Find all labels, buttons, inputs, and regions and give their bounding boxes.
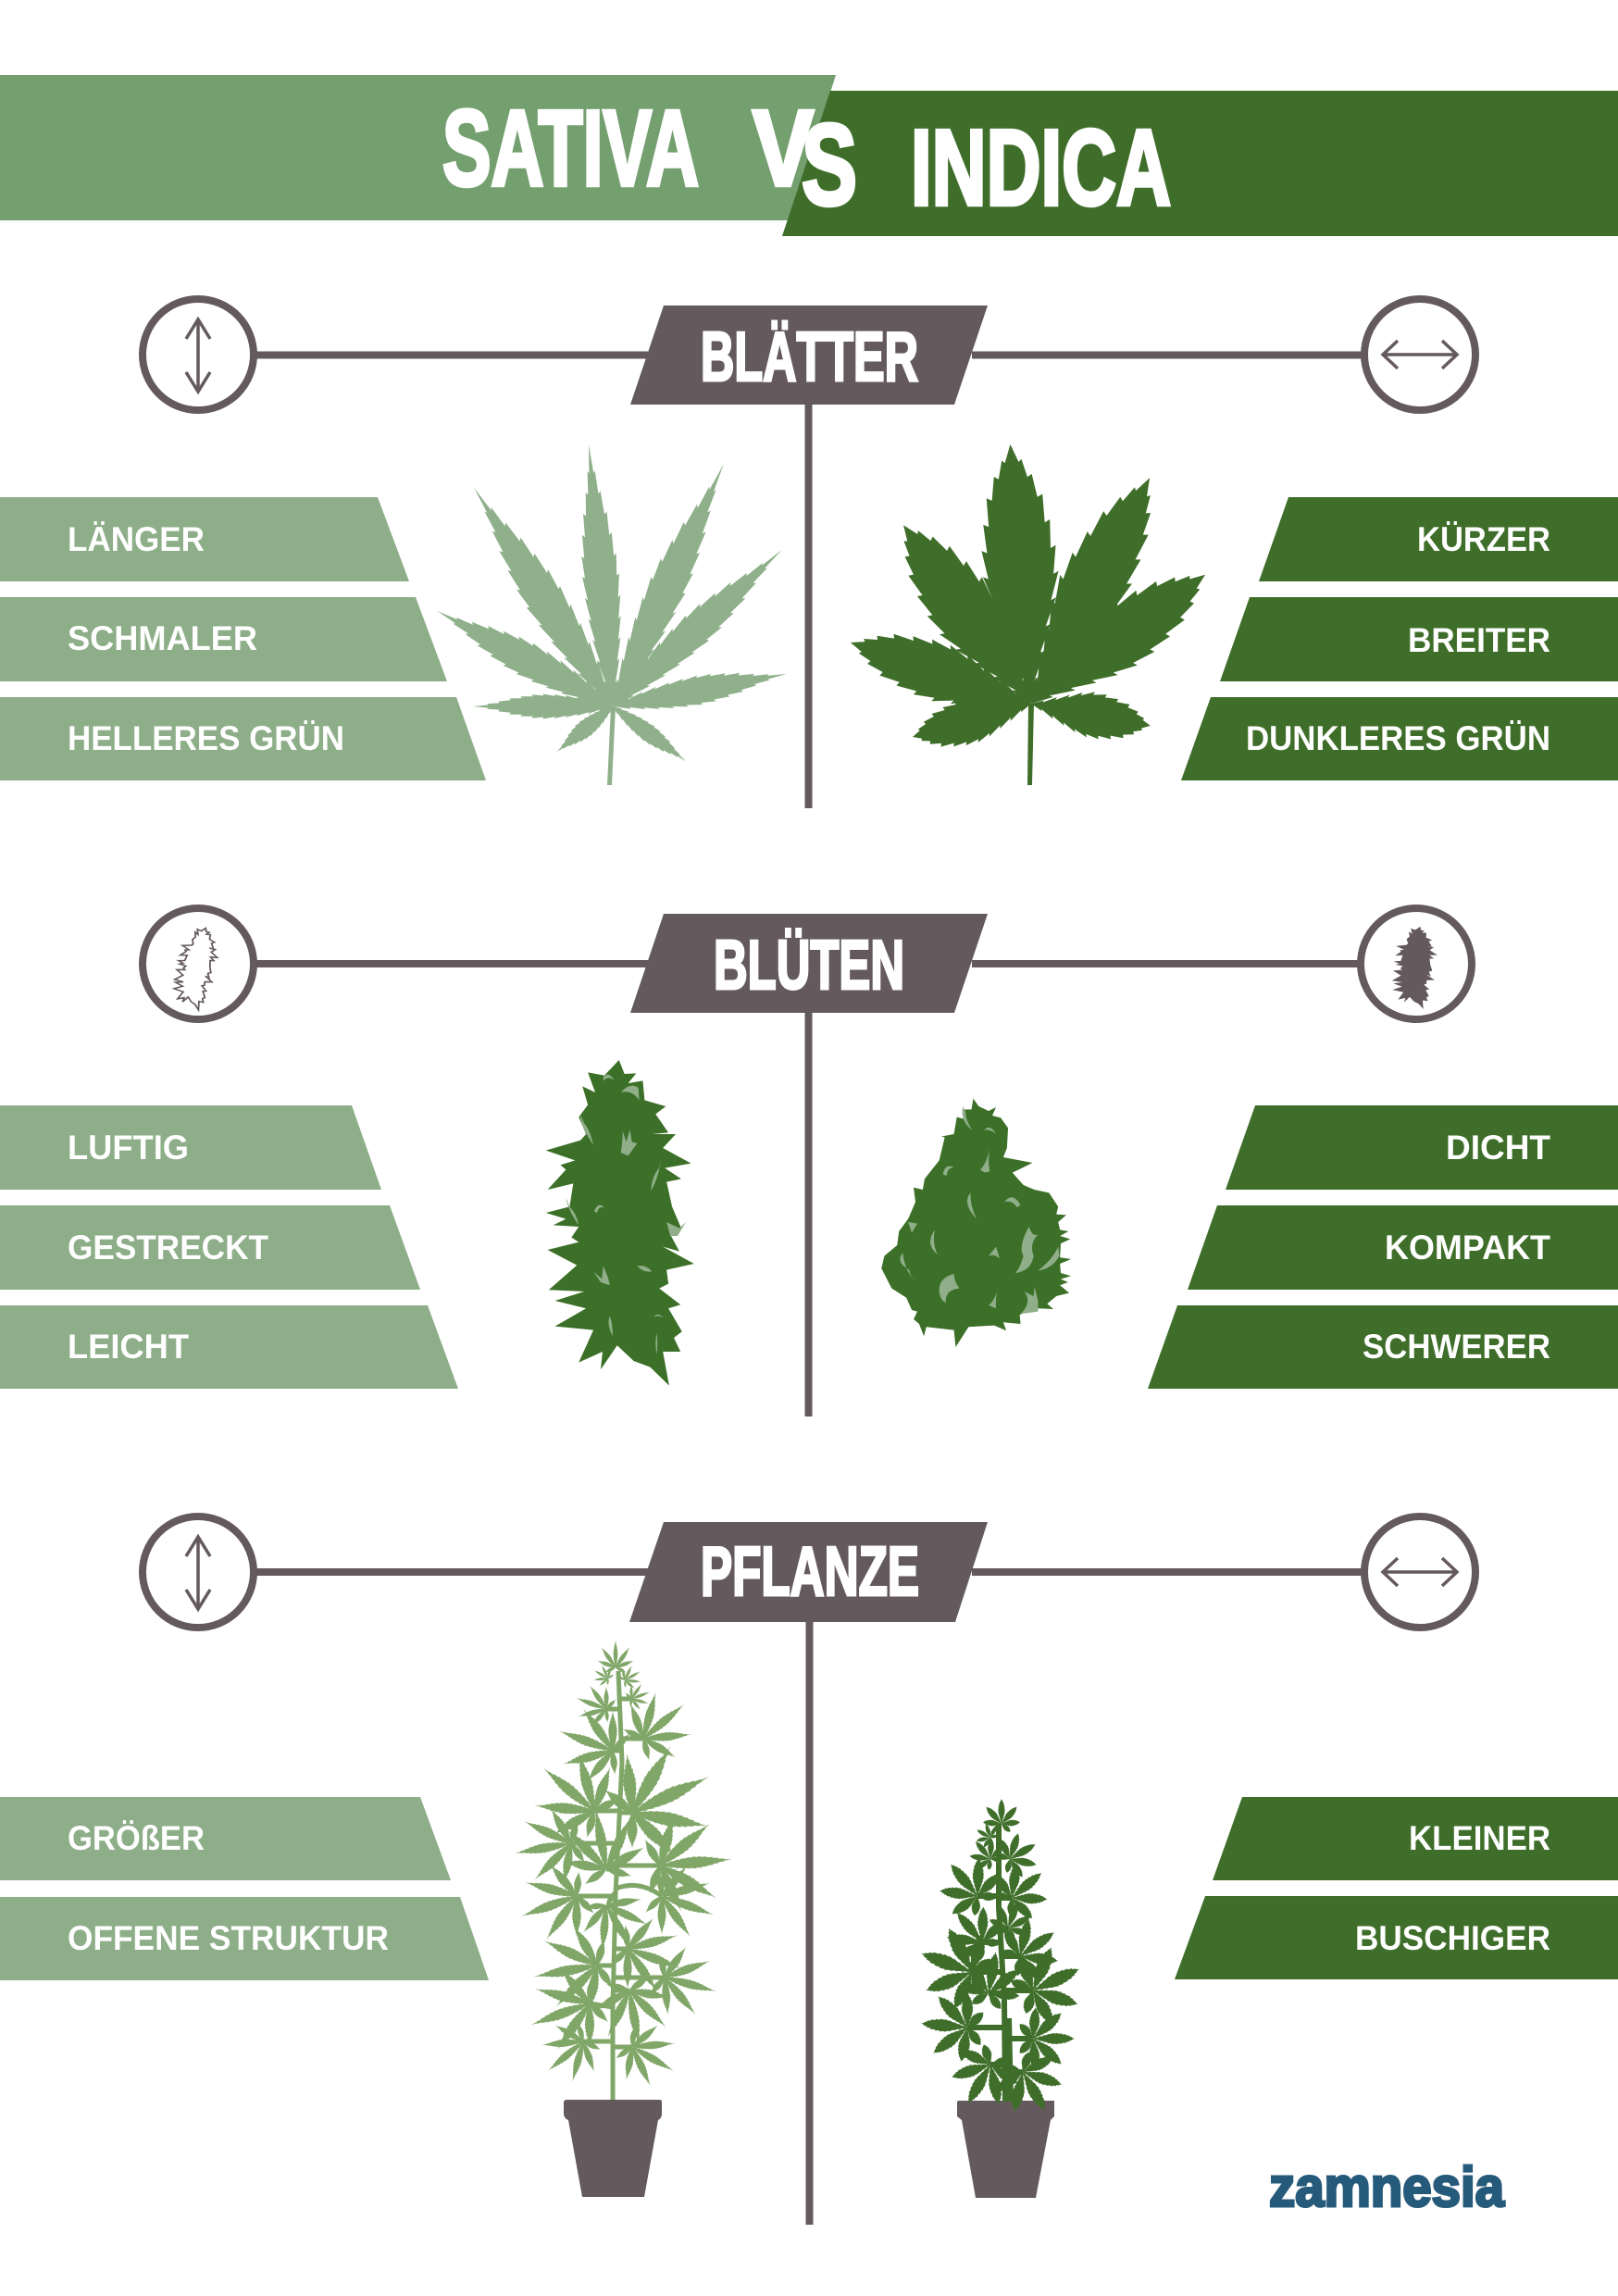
bar: luftig — [0, 1105, 381, 1190]
bar: leicht — [0, 1305, 458, 1389]
title: sativa: SATIVA — [442, 88, 699, 208]
bar: offene struktur — [0, 1897, 489, 1980]
indica bud — [881, 1099, 1071, 1347]
logo: zamnesia: zamnesia — [1269, 2156, 1505, 2218]
sativa leaf attributes — [0, 497, 486, 780]
icon: horizontal arrow wide plant — [1364, 1516, 1475, 1628]
bar: kleiner — [1213, 1797, 1618, 1880]
heading: Blüten: BLÜTEN — [714, 926, 904, 1004]
bar: kürzer — [1259, 497, 1618, 581]
bar: breiter: BREITER — [1408, 620, 1550, 659]
connector lines — [255, 1572, 1363, 2225]
bar: offene struktur: OFFENE STRUKTUR — [68, 1918, 389, 1957]
heading: Pflanze: PFLANZE — [701, 1532, 919, 1610]
fan leaves — [507, 1640, 736, 2100]
icon: vertical arrow long leaf — [143, 299, 254, 410]
bar: größer: GRÖßER — [68, 1818, 205, 1857]
bar: dunkleres grün: DUNKLERES GRÜN — [1246, 718, 1550, 757]
title: indica: INDICA — [911, 107, 1171, 228]
stem — [967, 1824, 1033, 2102]
bar: länger: LÄNGER — [68, 519, 205, 558]
bar: kürzer: KÜRZER — [1417, 519, 1550, 558]
indica plant attributes — [1175, 1797, 1618, 1979]
stem — [571, 1671, 665, 2102]
connector lines — [255, 356, 1363, 808]
sativa banner — [0, 75, 836, 220]
sativa bud — [546, 1060, 694, 1386]
bar: luftig: LUFTIG — [68, 1128, 189, 1167]
section: Pflanze — [0, 1516, 1618, 2225]
sativa bud attributes — [0, 1105, 458, 1389]
title: S of vs: S — [802, 102, 857, 230]
icon: horizontal arrow wide leaf — [1364, 299, 1475, 410]
indica bud attributes — [1148, 1105, 1618, 1389]
bar: schwerer — [1148, 1305, 1618, 1389]
bar: größer — [0, 1797, 451, 1880]
connector lines — [255, 964, 1359, 1416]
bar: länger — [0, 497, 409, 581]
bar: buschiger: BUSCHIGER — [1355, 1918, 1550, 1957]
bar: schwerer: SCHWERER — [1363, 1327, 1550, 1366]
heading: Blätter: BLÄTTER — [701, 318, 918, 395]
bar: dunkleres grün — [1181, 697, 1618, 780]
bar: leicht: LEICHT — [68, 1327, 189, 1366]
section: Blüten — [0, 908, 1618, 1416]
icon: vertical arrow tall plant — [143, 1516, 254, 1628]
indica plant — [907, 1799, 1095, 2198]
heading: Pflanze — [629, 1522, 988, 1622]
pot — [564, 2100, 662, 2197]
pot — [957, 2101, 1054, 2198]
indica leaf — [841, 442, 1225, 785]
sativa leaf — [429, 443, 793, 785]
section: Blätter — [0, 299, 1618, 808]
bar: schmaler: SCHMALER — [68, 618, 257, 657]
bar: dicht — [1226, 1105, 1618, 1190]
bar: buschiger — [1175, 1896, 1618, 1979]
bar: kompakt: KOMPAKT — [1385, 1228, 1550, 1267]
indica leaf attributes — [1181, 497, 1618, 780]
bar: gestreckt — [0, 1205, 420, 1290]
bar: breiter — [1220, 597, 1618, 681]
icon: dense bud filled — [1361, 908, 1472, 1019]
heading: Blüten — [630, 914, 988, 1013]
heading: Blätter — [630, 306, 988, 405]
icon: airy bud outline — [143, 908, 254, 1019]
bar: schmaler — [0, 597, 447, 681]
bar: helleres grün — [0, 697, 486, 780]
bar: helleres grün: HELLERES GRÜN — [68, 718, 344, 757]
bar: dicht: DICHT — [1446, 1128, 1550, 1167]
header banner — [0, 75, 1618, 236]
bar: kleiner: KLEINER — [1409, 1818, 1550, 1857]
fan leaves — [907, 1799, 1095, 2128]
title: V of vs: V — [753, 88, 814, 208]
indica banner — [782, 91, 1618, 236]
bar: kompakt — [1188, 1205, 1618, 1290]
bar: gestreckt: GESTRECKT — [68, 1228, 268, 1267]
sativa plant — [507, 1640, 736, 2197]
sativa plant attributes — [0, 1797, 489, 1980]
